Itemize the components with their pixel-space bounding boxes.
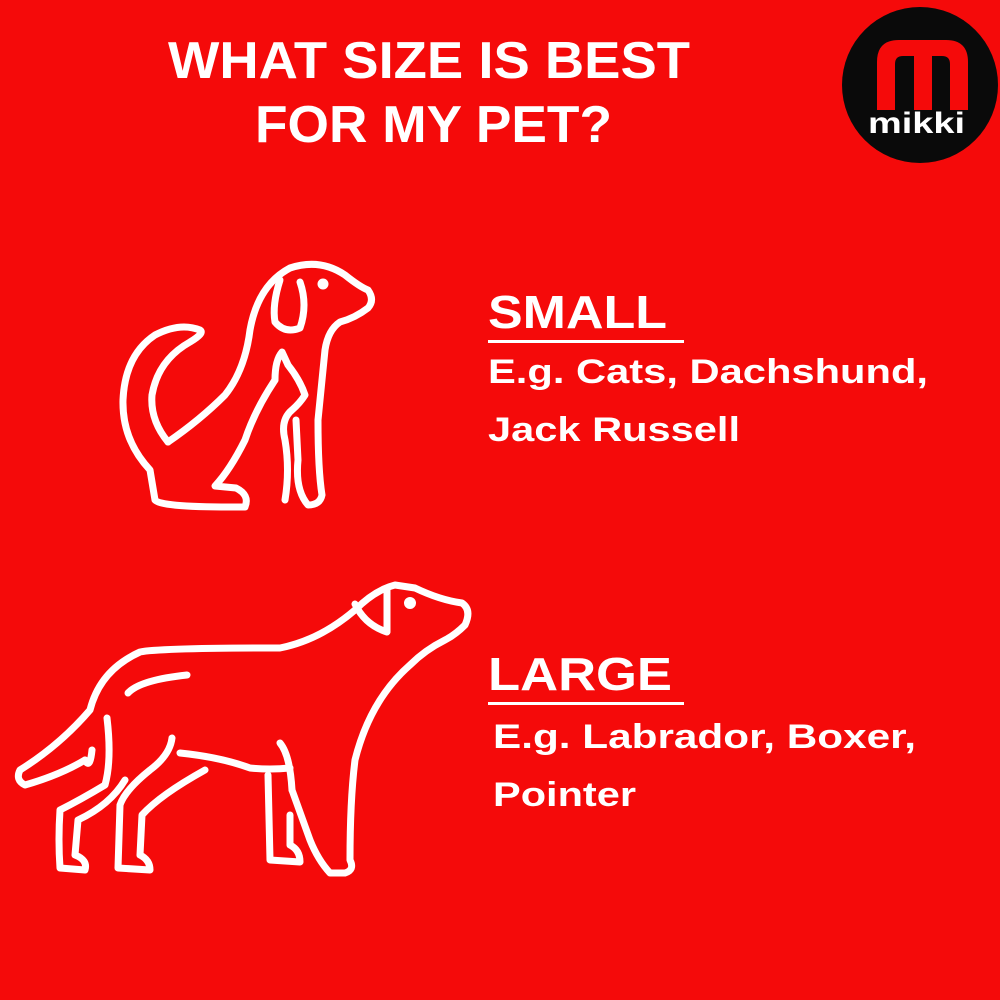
heading: large: LARGE [488, 648, 672, 700]
heading: large: Pointer [493, 776, 636, 814]
title: FOR MY PET? [255, 96, 612, 154]
heading: small: E.g. Cats, Dachshund, [488, 353, 928, 391]
title [168, 32, 690, 154]
title: WHAT SIZE IS BEST [168, 32, 690, 90]
logo: mikki [842, 7, 998, 163]
icon: large dog [18, 585, 468, 873]
logo: mikki: mikki [868, 107, 965, 140]
icon: small dog and cat [123, 264, 372, 507]
heading: small: SMALL [488, 286, 667, 338]
heading: large: E.g. Labrador, Boxer, [493, 718, 916, 756]
heading: large [488, 648, 916, 814]
heading: small [488, 286, 928, 449]
heading: small: Jack Russell [488, 411, 740, 449]
